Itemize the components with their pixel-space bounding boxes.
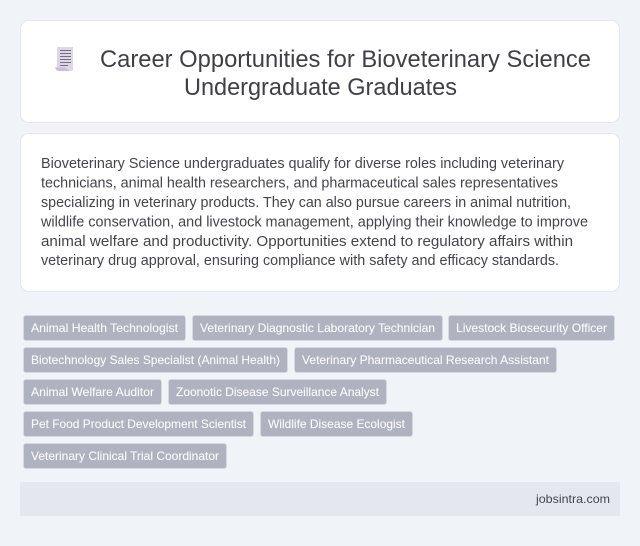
tag bbox=[24, 380, 162, 404]
tag: Biotechnology Sales Specialist (Animal Health) bbox=[31, 353, 280, 367]
tag bbox=[294, 348, 556, 372]
title bbox=[100, 46, 591, 101]
tag bbox=[24, 316, 186, 340]
panel: description: wildlife conservation, and livestock management, applying their knowledge to improve bbox=[40, 214, 588, 230]
panel: title card bbox=[20, 20, 620, 122]
tag: Animal Health Technologist bbox=[31, 321, 179, 335]
panel: description: technicians, animal health researchers, and pharmaceutical sales representatives bbox=[41, 176, 558, 192]
icon: document scroll bbox=[55, 47, 73, 71]
tag: Livestock Biosecurity Officer bbox=[456, 321, 607, 335]
tag bbox=[24, 444, 226, 468]
tag: Veterinary Pharmaceutical Research Assistant bbox=[302, 353, 550, 367]
tag: Wildlife Disease Ecologist bbox=[268, 417, 406, 431]
panel: description bbox=[20, 134, 620, 292]
tag: Pet Food Product Development Scientist bbox=[31, 417, 247, 431]
panel: description: veterinary drug approval, ensuring compliance with safety and efficacy standards. bbox=[41, 253, 559, 269]
tag bbox=[168, 380, 386, 404]
footer: jobsintra.com bbox=[535, 492, 610, 506]
tag bbox=[192, 316, 442, 340]
tag bbox=[260, 412, 412, 436]
tag: Veterinary Clinical Trial Coordinator bbox=[31, 449, 219, 463]
tag: Veterinary Diagnostic Laboratory Technician bbox=[200, 321, 435, 335]
panel: description: Bioveterinary Science undergraduates qualify for diverse roles including veterinary bbox=[41, 156, 565, 172]
tag: Animal Welfare Auditor bbox=[31, 385, 154, 399]
tag bbox=[24, 348, 288, 372]
title: Undergraduate Graduates bbox=[184, 74, 457, 101]
tag: Zoonotic Disease Surveillance Analyst bbox=[176, 385, 380, 399]
tag bbox=[24, 412, 254, 436]
tag bbox=[448, 316, 614, 340]
panel: description: specializing in veterinary products. They can also pursue careers in animal nutrition, bbox=[41, 195, 571, 211]
footer bbox=[20, 482, 620, 516]
panel: description: animal welfare and productivity. Opportunities extend to regulatory affairs within bbox=[41, 234, 573, 250]
title: Career Opportunities for Bioveterinary Science bbox=[100, 46, 591, 73]
tag list bbox=[24, 316, 614, 468]
